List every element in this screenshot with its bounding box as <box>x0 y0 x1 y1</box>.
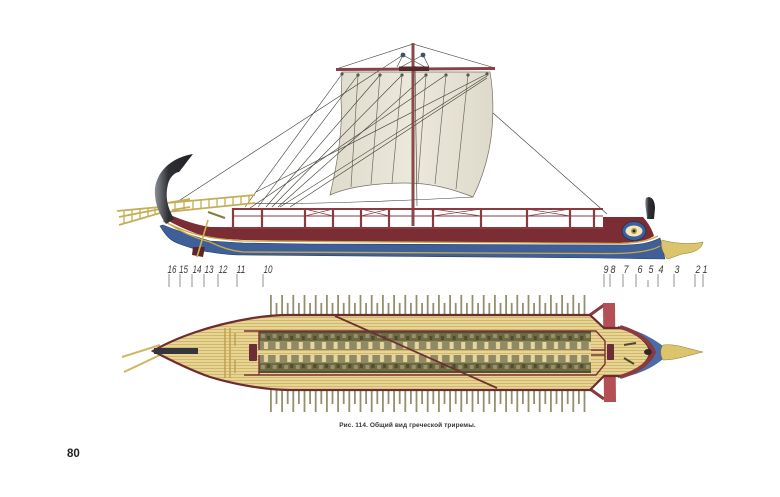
stern ladders <box>117 195 255 225</box>
bow stem post <box>645 197 655 219</box>
oars <box>270 305 586 401</box>
reference numbers: 10 <box>264 264 273 276</box>
ram head plan <box>661 345 703 360</box>
steering oars <box>122 345 160 372</box>
reference numbers: 1 <box>702 264 708 276</box>
reference numbers: 14 <box>192 264 202 276</box>
catheads <box>590 303 616 402</box>
caption: Рис. 114. Общий вид греческой триремы. <box>339 421 476 429</box>
deck <box>153 315 650 390</box>
reference numbers: 11 <box>236 264 246 276</box>
mast and yard <box>336 43 495 226</box>
cross beam at stern <box>225 328 235 378</box>
stern post <box>155 154 193 224</box>
reference numbers: 6 <box>638 264 643 276</box>
hull yellow stripes <box>163 221 660 254</box>
mast step <box>249 344 257 361</box>
stern post bar <box>154 348 198 354</box>
reference numbers: 8 <box>610 264 616 276</box>
anchors on foredeck <box>624 343 636 364</box>
reference numbers: 16 <box>168 264 177 276</box>
bow hatch <box>607 344 614 360</box>
sail <box>330 72 493 197</box>
reference numbers: 12 <box>218 264 228 276</box>
hull blue underside <box>160 225 665 259</box>
reference numbers: 4 <box>658 264 664 276</box>
bow blue <box>618 326 663 378</box>
bow eye <box>622 222 646 240</box>
reference numbers: 3 <box>674 264 680 276</box>
hull red planking <box>162 215 654 243</box>
reference numbers <box>168 264 708 276</box>
number tick marks <box>169 274 703 287</box>
prow cap <box>644 349 652 355</box>
rowers lower bank <box>259 355 591 373</box>
rigging lines <box>177 44 607 214</box>
page number: 80 <box>67 448 80 460</box>
reference numbers: 2 <box>695 264 700 276</box>
side view of trireme <box>117 43 703 259</box>
plan view of trireme <box>122 303 703 402</box>
bow red collar <box>620 327 654 377</box>
rowing well frame <box>244 331 605 375</box>
reference numbers: 7 <box>624 264 629 276</box>
reference numbers: 13 <box>204 264 214 276</box>
rowers upper bank <box>259 331 591 350</box>
yard lying on deck <box>335 316 497 388</box>
reference numbers: 9 <box>604 264 608 276</box>
deck railing <box>232 208 603 228</box>
steering oar <box>192 212 225 257</box>
reference numbers: 5 <box>648 264 654 276</box>
reference numbers: 15 <box>179 264 189 276</box>
ram head <box>661 240 703 259</box>
